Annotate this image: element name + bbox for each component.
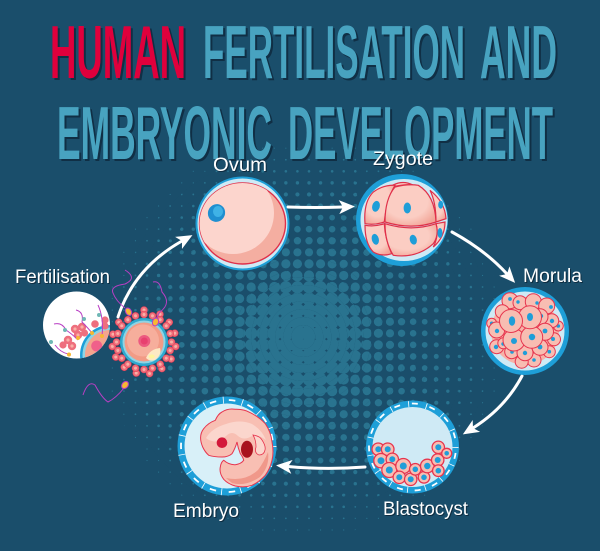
label: Ovum: Ovum	[213, 155, 267, 176]
label: Zygote: Zygote	[373, 149, 433, 170]
panel: blastocyst	[366, 400, 459, 494]
arrow: fertilisation to ovum	[118, 241, 182, 317]
title: HUMAN	[50, 10, 186, 94]
arrow: morula to blastocyst	[473, 376, 522, 428]
label: Morula: Morula	[523, 266, 582, 287]
halftone dot background	[112, 148, 495, 530]
panel: egg with sperm	[83, 270, 180, 402]
title	[50, 10, 557, 175]
label: Fertilisation: Fertilisation	[15, 267, 110, 288]
arrow: blastocyst to embryo	[288, 466, 365, 468]
panel: embryo	[178, 396, 276, 496]
panel: fertilisation close-up	[43, 292, 110, 358]
arrow: zygote to morula	[452, 232, 507, 274]
label: Blastocyst: Blastocyst	[383, 499, 469, 520]
label: Embryo: Embryo	[173, 501, 239, 522]
panel: morula	[481, 287, 569, 375]
panel: ovum	[192, 172, 290, 270]
panel: zygote	[356, 174, 448, 266]
arrow: ovum to zygote	[288, 206, 343, 209]
title: EMBRYONIC	[57, 91, 272, 175]
